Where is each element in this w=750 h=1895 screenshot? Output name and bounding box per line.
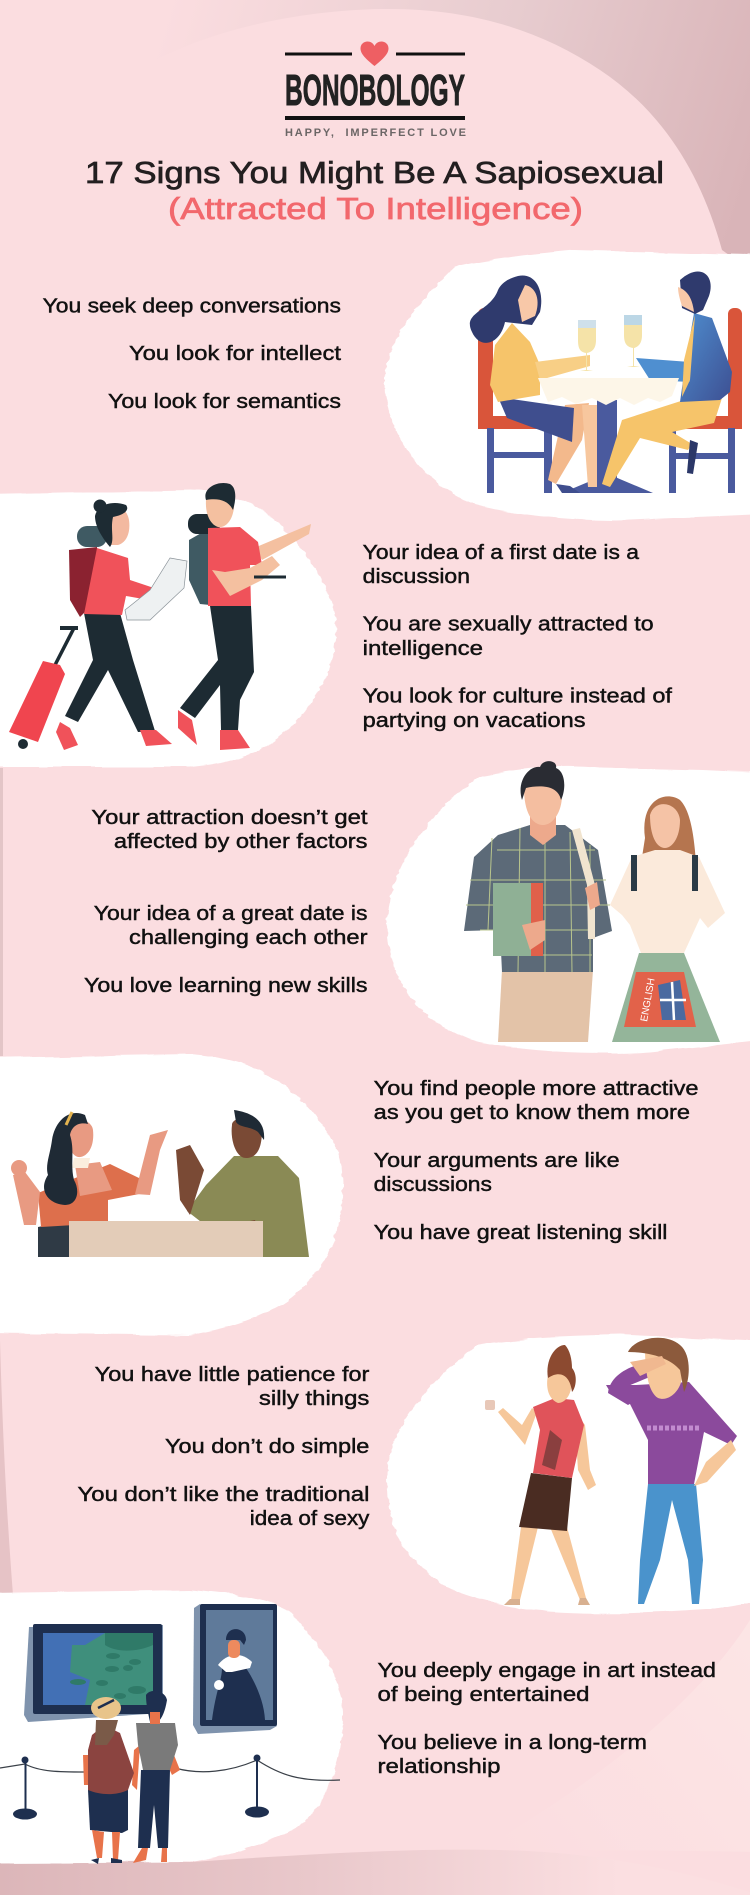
- text block: section 6: You believe in a long-term: [378, 1731, 647, 1754]
- text block: section 2: partying on vacations: [363, 709, 586, 732]
- text block: section 3: [84, 806, 368, 997]
- text block: section 4: Your arguments are like: [374, 1149, 620, 1172]
- text block: section 6: [378, 1659, 716, 1778]
- illustration: couple at art gallery: [0, 1604, 340, 1864]
- text block: section 4: discussions: [374, 1173, 492, 1196]
- text block: section 2: You look for culture instead of: [363, 685, 672, 708]
- illustration: two people discussing: [11, 1110, 309, 1257]
- text block: section 4: [374, 1077, 699, 1244]
- logo: Bonobology: BONOBOLOGY: [285, 66, 465, 115]
- logo: Bonobology: HAPPY, IMPERFECT LOVE: [285, 127, 466, 139]
- text block: section 5: You don’t do simple: [165, 1435, 369, 1458]
- logo: Bonobology: [285, 42, 466, 139]
- text block: section 4: You have great listening skill: [374, 1221, 668, 1244]
- title: 17 Signs You Might Be A Sapiosexual: [85, 155, 664, 190]
- text block: section 4: You find people more attractive: [374, 1077, 699, 1100]
- text block: section 2: [363, 541, 672, 732]
- text block: section 3: Your attraction doesn’t get: [91, 806, 368, 829]
- text block: section 5: [78, 1363, 370, 1530]
- text block: section 3: challenging each other: [129, 926, 368, 949]
- illustration: two students: ENGLISH: [639, 977, 658, 1023]
- text block: section 6: of being entertained: [378, 1683, 590, 1706]
- illustration: two students: [464, 761, 725, 1042]
- text block: section 3: You love learning new skills: [84, 974, 368, 997]
- text block: section 6: relationship: [378, 1755, 500, 1778]
- text block: section 1: You look for semantics: [108, 390, 341, 413]
- title: [85, 155, 664, 226]
- illustration: travellers with map: [9, 483, 311, 750]
- illustration: woman with coffee and laughing man: [485, 1338, 737, 1605]
- icon: heart: [360, 42, 388, 66]
- text block: section 1: You seek deep conversations: [43, 294, 341, 318]
- text block: section 3: affected by other factors: [114, 830, 368, 853]
- text block: section 5: silly things: [259, 1387, 369, 1410]
- text block: section 2: intelligence: [363, 637, 483, 660]
- text block: section 2: discussion: [363, 565, 470, 588]
- text block: section 1: You look for intellect: [129, 342, 341, 365]
- illustration: couple at dinner: [470, 271, 742, 493]
- text block: section 4: as you get to know them more: [374, 1101, 690, 1124]
- text block: section 2: Your idea of a first date is a: [363, 541, 640, 564]
- text block: section 5: You have little patience for: [95, 1363, 370, 1386]
- text block: section 1: [43, 294, 341, 413]
- text block: section 6: You deeply engage in art instead: [378, 1659, 716, 1682]
- text block: section 2: You are sexually attracted to: [363, 613, 654, 636]
- text block: section 5: You don’t like the traditional: [78, 1483, 369, 1506]
- title: (Attracted To Intelligence): [168, 191, 583, 226]
- text block: section 3: Your idea of a great date is: [94, 902, 368, 925]
- text block: section 5: idea of sexy: [250, 1507, 370, 1530]
